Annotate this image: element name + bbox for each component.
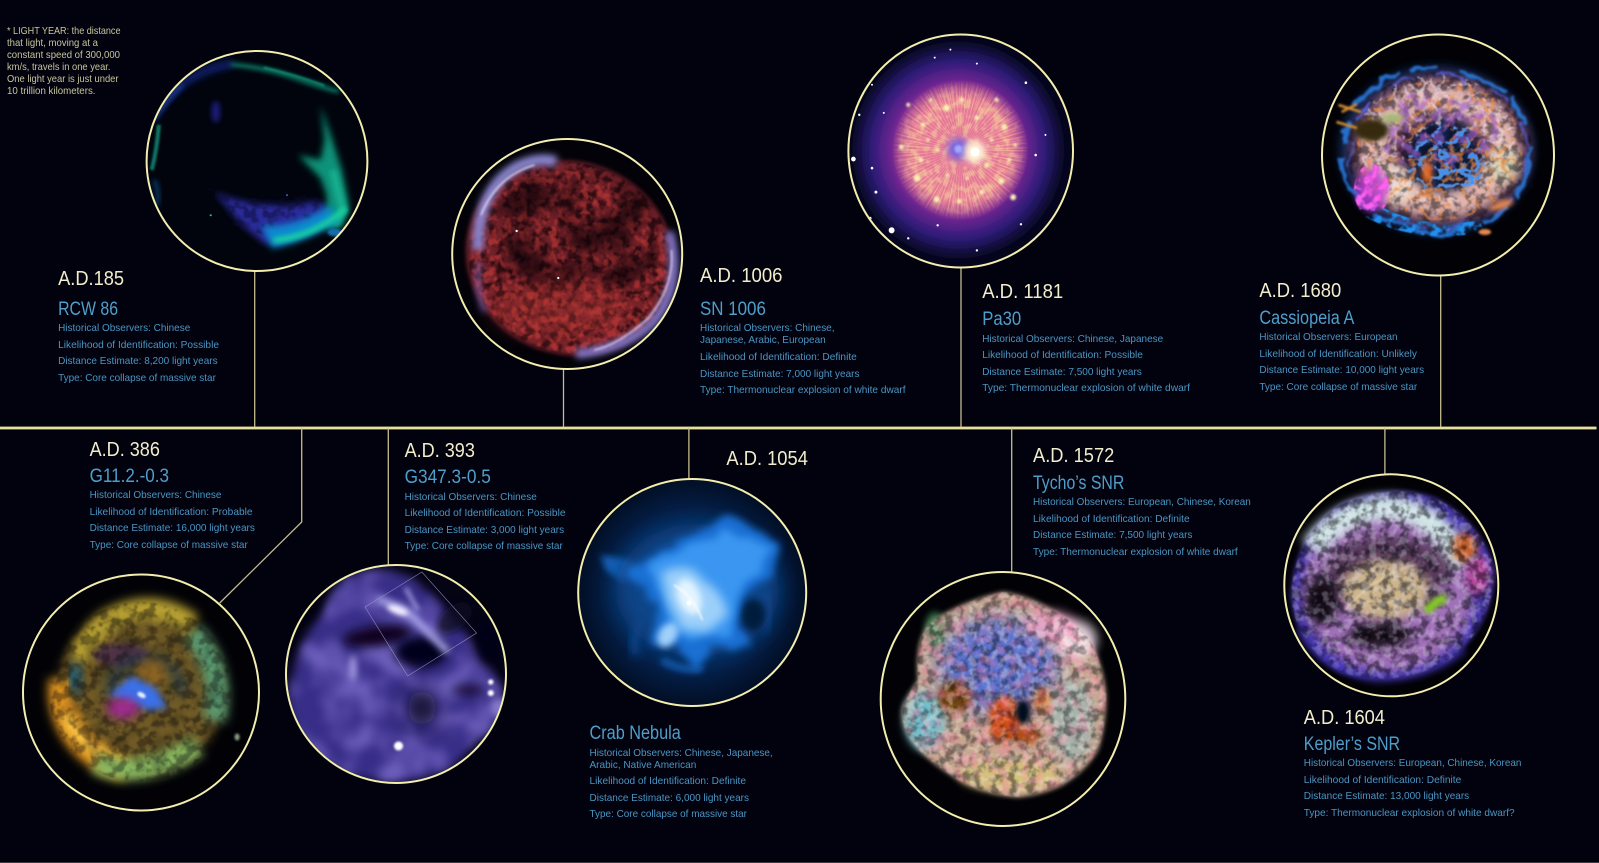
details: Likelihood of Identification: Possible — [982, 350, 1143, 361]
date: A.D. 1054: A.D. 1054 — [726, 448, 808, 470]
date: A.D. 386 — [90, 439, 160, 461]
details: Type: Thermonuclear explosion of white dwarf — [1033, 547, 1238, 558]
details: Type: Thermonuclear explosion of white dwarf — [982, 383, 1190, 394]
name: G11.2.-0.3 — [90, 466, 169, 487]
name: Crab Nebula — [590, 723, 681, 744]
footnote: light year definition: 10 trillion kilometers. — [7, 85, 96, 97]
date: A.D. 393 — [405, 440, 475, 462]
details — [1259, 332, 1424, 393]
date: A.D. 1604 — [1304, 707, 1385, 729]
footnote: light year definition: constant speed of 300,000 — [7, 49, 120, 61]
timeline axis — [0, 427, 1596, 429]
image: Tycho's SNR — [881, 572, 1125, 826]
details: Historical Observers: European, Chinese, Korean — [1304, 758, 1522, 769]
details — [58, 323, 219, 384]
footnote: light year definition: that light, moving at a — [7, 37, 98, 49]
details: Likelihood of Identification: Unlikely — [1259, 349, 1418, 360]
details: Likelihood of Identification: Possible — [58, 340, 219, 351]
image: Kepler's SNR — [1284, 474, 1498, 696]
image: G11.2-0.3 — [23, 574, 259, 810]
image: Crab Nebula — [578, 479, 806, 706]
date: A.D. 1680 — [1259, 280, 1341, 302]
date: A.D. 1572 — [1033, 445, 1114, 467]
name: Kepler’s SNR — [1304, 734, 1400, 755]
name: RCW 86 — [58, 299, 118, 320]
caption: A.D. 1604 Kepler's SNR — [1304, 707, 1522, 819]
details — [405, 492, 566, 552]
name: Pa30 — [982, 309, 1021, 330]
image: G347.3-0.5 — [285, 564, 507, 784]
details — [1033, 497, 1251, 558]
details — [700, 323, 906, 396]
remnant body — [1291, 491, 1495, 680]
remnant blob — [902, 592, 1106, 797]
details: Historical Observers: Chinese — [58, 323, 191, 334]
date: A.D.185 — [58, 268, 124, 290]
image: RCW 86 — [147, 51, 367, 271]
name: G347.3-0.5 — [405, 467, 491, 488]
caption: A.D. 1680 Cassiopeia A — [1259, 280, 1424, 393]
name: SN 1006 — [700, 299, 766, 320]
details: Historical Observers: Chinese — [90, 490, 222, 501]
details: Type: Thermonuclear explosion of white dwarf — [700, 385, 906, 396]
details: Type: Core collapse of massive star — [58, 373, 216, 384]
details: Likelihood of Identification: Definite — [590, 776, 746, 787]
stems connecting images to timeline — [220, 267, 1441, 603]
bright filament inset — [365, 572, 477, 676]
details: Likelihood of Identification: Possible — [405, 508, 566, 519]
details: Likelihood of Identification: Probable — [90, 507, 253, 518]
details: Distance Estimate: 10,000 light years — [1259, 365, 1424, 376]
details: Type: Core collapse of massive star — [90, 540, 248, 551]
details: Likelihood of Identification: Definite — [700, 352, 857, 363]
caption: Crab Nebula — [590, 723, 773, 820]
caption: A.D. 386 G11.2-0.3 — [90, 439, 255, 551]
details — [90, 490, 255, 551]
name: Tycho’s SNR — [1033, 473, 1124, 494]
details: Historical Observers: Chinese, — [700, 323, 834, 334]
details: Distance Estimate: 6,000 light years — [590, 793, 749, 804]
details: Type: Thermonuclear explosion of white dwarf? — [1304, 808, 1515, 819]
details: Distance Estimate: 16,000 light years — [90, 523, 255, 534]
caption: A.D. 393 G347.3-0.5 — [405, 440, 566, 552]
footnote: light year definition — [7, 25, 121, 97]
details: Historical Observers: Chinese, Japanese, — [590, 748, 773, 759]
caption: A.D. 1181 Pa30 — [982, 281, 1190, 394]
caption: A.D. 185 RCW 86 — [58, 268, 219, 384]
name: Cassiopeia A — [1259, 308, 1355, 329]
details: Distance Estimate: 3,000 light years — [405, 525, 564, 536]
image: SN 1006 — [451, 138, 684, 370]
details: Distance Estimate: 7,500 light years — [982, 367, 1142, 378]
details — [590, 748, 773, 820]
image: Pa30 — [848, 34, 1073, 268]
details: Likelihood of Identification: Definite — [1304, 775, 1462, 786]
image: Cassiopeia A — [1322, 34, 1554, 276]
date: A.D. 1181 — [982, 281, 1063, 303]
details: Type: Core collapse of massive star — [1259, 382, 1418, 393]
details: Historical Observers: Chinese, Japanese — [982, 334, 1163, 345]
details: Likelihood of Identification: Definite — [1033, 514, 1190, 525]
details: Distance Estimate: 8,200 light years — [58, 356, 218, 367]
details: Historical Observers: Chinese — [405, 492, 537, 503]
details — [1304, 758, 1522, 819]
footnote: light year definition: * LIGHT YEAR: the distance — [7, 25, 121, 37]
footnote: light year definition: km/s, travels in one year. — [7, 61, 110, 73]
footnote: light year definition: One light year is just under — [7, 73, 119, 85]
details: Japanese, Arabic, European — [700, 335, 826, 346]
details: Historical Observers: European — [1259, 332, 1398, 343]
details: Distance Estimate: 7,500 light years — [1033, 530, 1192, 541]
details: Type: Core collapse of massive star — [590, 809, 748, 820]
details: Historical Observers: European, Chinese, Korean — [1033, 497, 1251, 508]
details: Distance Estimate: 7,000 light years — [700, 369, 860, 380]
details: Arabic, Native American — [590, 760, 697, 771]
caption: A.D. 1572 Tycho's SNR — [1033, 445, 1251, 558]
caption: A.D. 1006 SN 1006 — [700, 265, 906, 396]
date: A.D. 1006 — [700, 265, 782, 287]
details: Type: Core collapse of massive star — [405, 541, 563, 552]
details: Distance Estimate: 13,000 light years — [1304, 791, 1469, 802]
details — [982, 334, 1190, 394]
